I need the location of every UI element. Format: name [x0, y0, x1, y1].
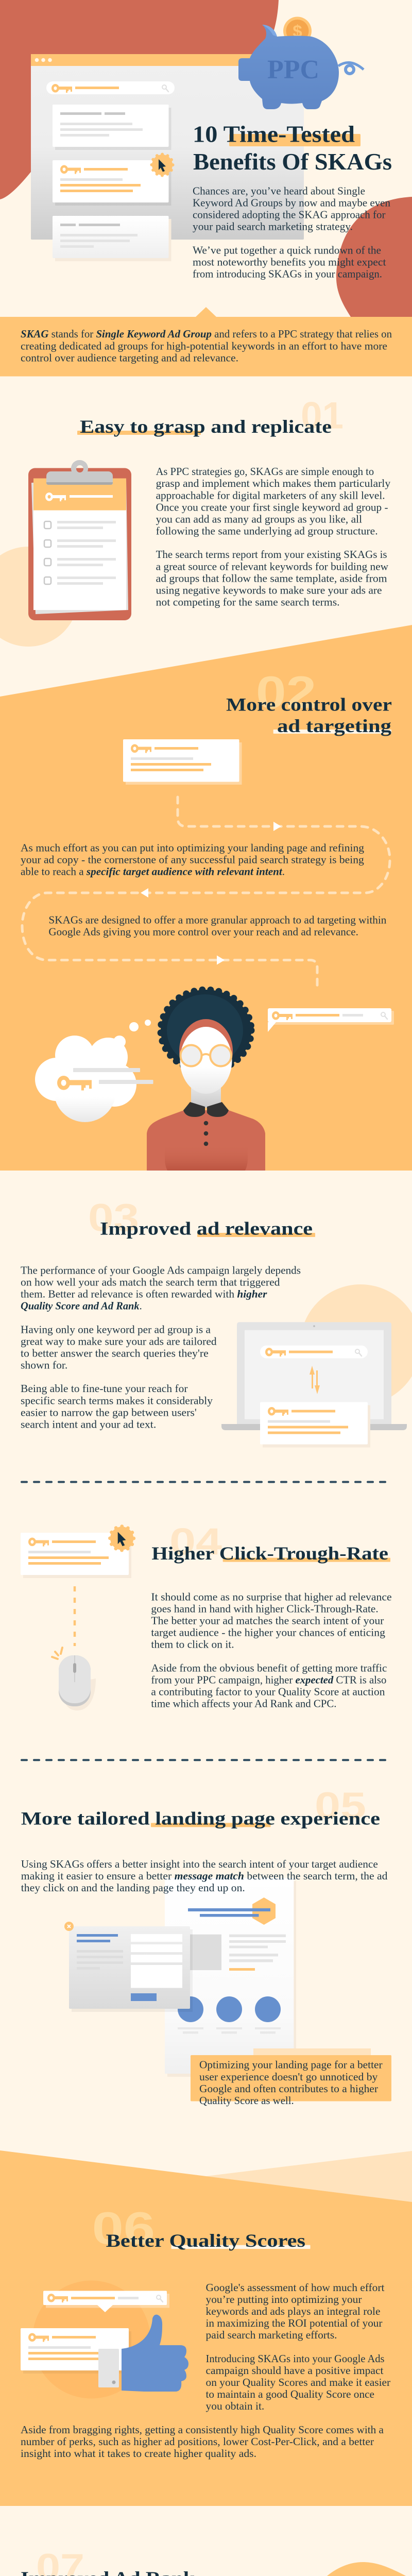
intro text: considered adopting the SKAG approach for — [193, 208, 385, 221]
body text: in maximizing the ROI potential of your — [206, 2317, 382, 2329]
intro text: Chances are, you’ve heard about Single — [193, 184, 365, 197]
thought cloud — [35, 1020, 153, 1122]
number 01: 01 — [301, 395, 344, 437]
body text — [21, 1264, 301, 1430]
body text: It should come as no surprise that higher ad relevance — [151, 1591, 392, 1603]
body text: Using SKAGs offers a better insight into the search intent of your target audience — [21, 1858, 378, 1870]
body text: campaign should have a positive impact — [206, 2364, 384, 2377]
callout: quality score note: Google and often contributes to a higher — [199, 2082, 378, 2095]
body text: you can add as many ad groups as you like, all — [156, 513, 362, 525]
body text: specific search terms makes it considerably — [21, 1394, 213, 1406]
body text: to maintain a good Quality Score once — [206, 2388, 374, 2400]
heading: Higher Click-Trough-Rate — [151, 1543, 388, 1564]
body text: following the same underlying ad group structure. — [156, 524, 378, 537]
body text: Quality Score and Ad Rank. — [21, 1300, 142, 1312]
panel: SKAG definition banner — [0, 307, 412, 376]
body text: approachable for digital marketers of any skill level. — [156, 489, 385, 501]
intro text: Keyword Ad Groups by now and maybe even — [193, 196, 390, 209]
body text: them. Better ad relevance is often rewarded with higher — [21, 1288, 267, 1300]
title: Benefits Of SKAGs — [193, 148, 392, 175]
number 05: 05 — [315, 1785, 366, 1827]
search result card 1 — [53, 105, 171, 150]
body text: Being able to fine-tune your reach for — [21, 1382, 187, 1395]
decorative peach circle — [0, 547, 78, 647]
body text: number of perks, such as higher ad positions, lower Cost-Per-Click, and a better — [21, 2435, 374, 2448]
number 02: 02 — [256, 667, 316, 718]
panel: 05 landing page — [21, 1785, 391, 2107]
search bubble — [268, 1008, 394, 1032]
illustration: person with glasses — [147, 990, 265, 1171]
panel: SKAG definition banner: creating dedicated ad groups for high-potential keywords in an effort to have more — [21, 340, 387, 352]
illustration: thumbs up on ad — [21, 2280, 188, 2399]
panel: 04 higher CTR — [21, 1521, 392, 1710]
body text: As much effort as you can put into optimizing your landing page and refining — [21, 841, 364, 854]
body text: The search terms report from your existing SKAGs is — [156, 548, 387, 561]
panel: 07 improved ad rank — [21, 2553, 406, 2576]
heading — [226, 694, 392, 736]
panel: 03 improved ad relevance — [21, 1196, 412, 1448]
decorative peach circle — [300, 1284, 412, 1405]
illustration: PPC piggy bank — [238, 16, 364, 109]
body text: Having only one keyword per ad group is a — [21, 1323, 211, 1335]
number 03: 03 — [88, 1196, 139, 1239]
body text: your ad copy - the cornerstone of any successful paid search strategy is being — [21, 853, 364, 866]
body text — [21, 841, 387, 938]
coin: $ — [293, 22, 302, 41]
body text: keywords and ads plays an integral role — [206, 2305, 380, 2317]
icon: click badge — [151, 155, 173, 175]
callout: quality score note: Optimizing your landing page for a better — [199, 2059, 383, 2071]
body text: Introducing SKAGs into your Google Ads — [206, 2352, 384, 2365]
decorative red blob right — [336, 197, 412, 317]
intro text: We’ve put together a quick rundown of the — [193, 244, 381, 256]
panel: SKAG definition banner: control over audience targeting and ad relevance. — [21, 351, 238, 364]
panel: SKAG definition banner: SKAG stands for Single Keyword Ad Group and refers to a PPC strategy that relies on — [21, 328, 392, 340]
pop-up form — [64, 1922, 193, 2012]
heading: Easy to grasp and replicate — [80, 416, 332, 437]
body text: target audience - the higher your chances of enticing — [151, 1626, 385, 1639]
illustration: clipboard — [28, 460, 131, 620]
divider — [22, 1759, 392, 1761]
body text: a great source of relevant keywords for building new — [156, 560, 389, 572]
callout: quality score note: Quality Score as well. — [199, 2094, 294, 2107]
intro text: from introducing SKAGs in your campaign. — [193, 267, 382, 280]
icon: thumbs up — [98, 2315, 188, 2392]
callout: quality score note: user experience doesn't go unnoticed by — [199, 2071, 378, 2083]
body text: using negative keywords to make sure your ads are — [156, 584, 382, 596]
body text: Aside from bragging rights, getting a consistently high Quality Score comes with a — [21, 2424, 384, 2436]
body text: The better your ad matches the search intent of your — [151, 1615, 384, 1627]
tail — [338, 62, 364, 70]
body text: easier to narrow the gap between users' — [21, 1406, 197, 1418]
body text: shown for. — [21, 1359, 67, 1371]
body text: on how well your ads match the search term that triggered — [21, 1276, 280, 1288]
search result card 2: SKAG ad — [53, 160, 171, 206]
intro text: your paid search marketing strategy. — [193, 221, 353, 233]
body text: insight into what it takes to create higher quality ads. — [21, 2447, 256, 2460]
divider — [22, 1481, 392, 1483]
intro text: most noteworthy benefits you might expect — [193, 256, 386, 268]
body text: making it easier to ensure a better message match between the search term, the ad — [21, 1870, 388, 1882]
callout: quality score note — [191, 2048, 391, 2107]
illustration: PPC piggy bank: PPC — [267, 55, 319, 84]
heading: Improved ad relevance — [100, 1218, 313, 1239]
body text — [151, 1591, 392, 1710]
heading: More control over — [226, 694, 392, 715]
title — [193, 121, 392, 175]
body text: Google Ads giving you more control over your reach and ad relevance. — [48, 926, 358, 938]
panel: 06 better quality scores — [0, 2150, 412, 2506]
body text: you’re putting into optimizing your — [206, 2293, 362, 2306]
icon: mouse — [52, 1648, 96, 1710]
body text: a contributing factor to your Quality Score at auction — [151, 1686, 385, 1698]
search bar — [43, 2291, 169, 2312]
body text: on your Quality Scores and make it easier — [206, 2376, 390, 2388]
body text: they click on and the landing page they end up on. — [21, 1882, 245, 1894]
body text — [21, 1858, 388, 1894]
arrows — [141, 822, 281, 964]
body text: Once you create your first single keyword ad group - — [156, 501, 388, 513]
number 06: 06 — [92, 2202, 155, 2253]
body text: to better answer the search queries they're — [21, 1347, 209, 1359]
heading: More tailored landing page experience — [21, 1808, 380, 1828]
body text: As PPC strategies go, SKAGs are simple enough to — [156, 465, 374, 478]
body text: not competing for the same search terms. — [156, 596, 340, 608]
search bar — [46, 81, 175, 94]
body text: ad groups that follow the same template, aside from — [156, 572, 387, 584]
body text: goes hand in hand with higher Click-Through-Rate. — [151, 1602, 379, 1615]
body text: Google's assessment of how much effort — [206, 2281, 385, 2294]
panel: 02 more control — [0, 625, 412, 1171]
body text: from your PPC campaign, higher expected CTR is also — [151, 1673, 386, 1686]
heading: Better Quality Scores — [106, 2230, 305, 2251]
body text — [156, 465, 390, 608]
body text: search intent and your ad text. — [21, 1418, 156, 1430]
heading highlight — [229, 134, 360, 146]
decorative red blob top left — [0, 0, 279, 199]
ad card with click badge — [21, 1527, 134, 1578]
heading: ad targeting — [277, 716, 391, 736]
body text: able to reach a specific target audience with relevant intent. — [21, 866, 285, 878]
ad card — [21, 2328, 131, 2374]
illustration: browser window — [31, 54, 304, 261]
ad card — [123, 739, 242, 785]
body text: The performance of your Google Ads campaign largely depends — [21, 1264, 301, 1276]
panel: hero — [0, 0, 412, 317]
body text: time which affects your Ad Rank and CPC. — [151, 1698, 336, 1710]
panel: 01 easy to grasp — [0, 395, 390, 647]
dashed connector — [74, 1586, 76, 1646]
body text: paid search marketing efforts. — [206, 2329, 337, 2341]
title: 10 Time-Tested — [193, 121, 355, 147]
body text: SKAGs are designed to offer a more granular approach to ad targeting within — [48, 914, 387, 926]
body text: them to click on it. — [151, 1638, 234, 1651]
dashed journey path — [22, 797, 390, 991]
coin — [283, 16, 312, 37]
decorative orange blob — [206, 2562, 412, 2576]
number 04: 04 — [169, 1521, 222, 1563]
illustration: laptop — [221, 1322, 407, 1448]
body text: great way to make sure your ads are tailored — [21, 1335, 217, 1347]
landing page mockup — [165, 1878, 296, 2077]
body text: grasp and implement which makes them particularly — [156, 477, 390, 489]
body text — [21, 2281, 390, 2460]
body text: Aside from the obvious benefit of getting more traffic — [151, 1662, 387, 1674]
search result card 3 — [53, 216, 171, 261]
intro text — [193, 184, 390, 280]
body text: you obtain it. — [206, 2400, 264, 2412]
